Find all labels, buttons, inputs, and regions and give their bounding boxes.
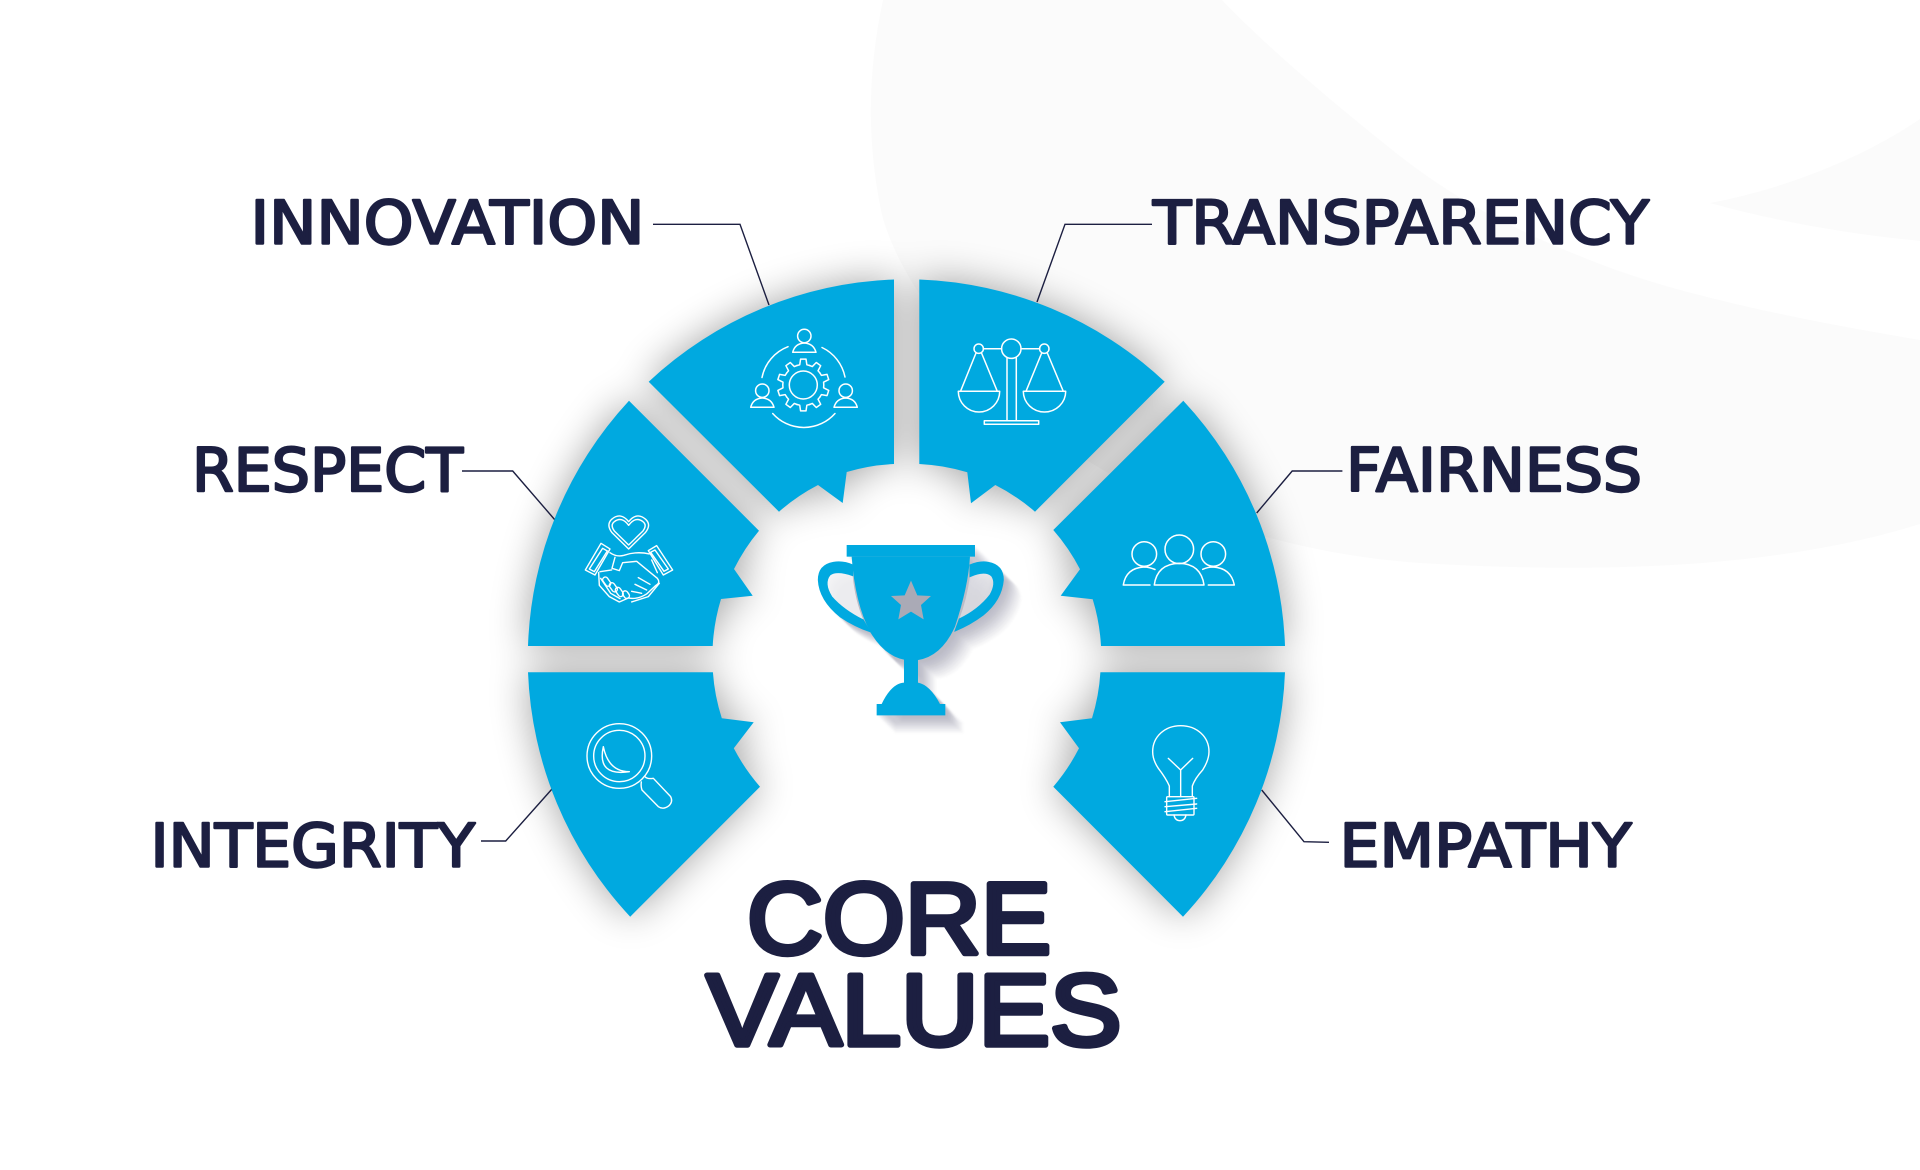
panel: transparency — [919, 280, 1165, 512]
icon: balance scale — [958, 339, 1066, 424]
icon: trophy — [818, 545, 1021, 733]
panel: respect — [528, 401, 759, 646]
icon: three people — [1123, 535, 1234, 585]
icon: heart and handshake — [585, 516, 673, 602]
panel: fairness — [1053, 401, 1285, 646]
panel: empathy — [1053, 672, 1285, 917]
leader line: fairness — [1257, 471, 1342, 513]
title: VALUES — [706, 955, 1122, 1067]
leader line: empathy — [1262, 790, 1329, 842]
leader line: respect — [462, 471, 555, 520]
leader line: integrity — [481, 789, 552, 841]
label: fairness: FAIRNESS — [1346, 436, 1642, 506]
icon: star — [891, 581, 931, 619]
title: CORE — [747, 864, 1051, 976]
icon: magnifying glass — [587, 724, 672, 808]
label: innovation: INNOVATION — [250, 188, 644, 258]
leader line: transparency — [1037, 224, 1152, 302]
panel: innovation — [649, 280, 894, 512]
label: integrity: INTEGRITY — [150, 812, 475, 882]
label: respect: RESPECT — [192, 436, 463, 506]
title — [706, 864, 1122, 1067]
leader line: innovation — [653, 224, 769, 305]
icon: people around gear — [751, 329, 857, 427]
icon: light bulb — [1153, 726, 1209, 821]
label: transparency: TRANSPARENCY — [1152, 188, 1649, 258]
label: empathy: EMPATHY — [1340, 812, 1632, 882]
panel: integrity — [528, 672, 760, 917]
